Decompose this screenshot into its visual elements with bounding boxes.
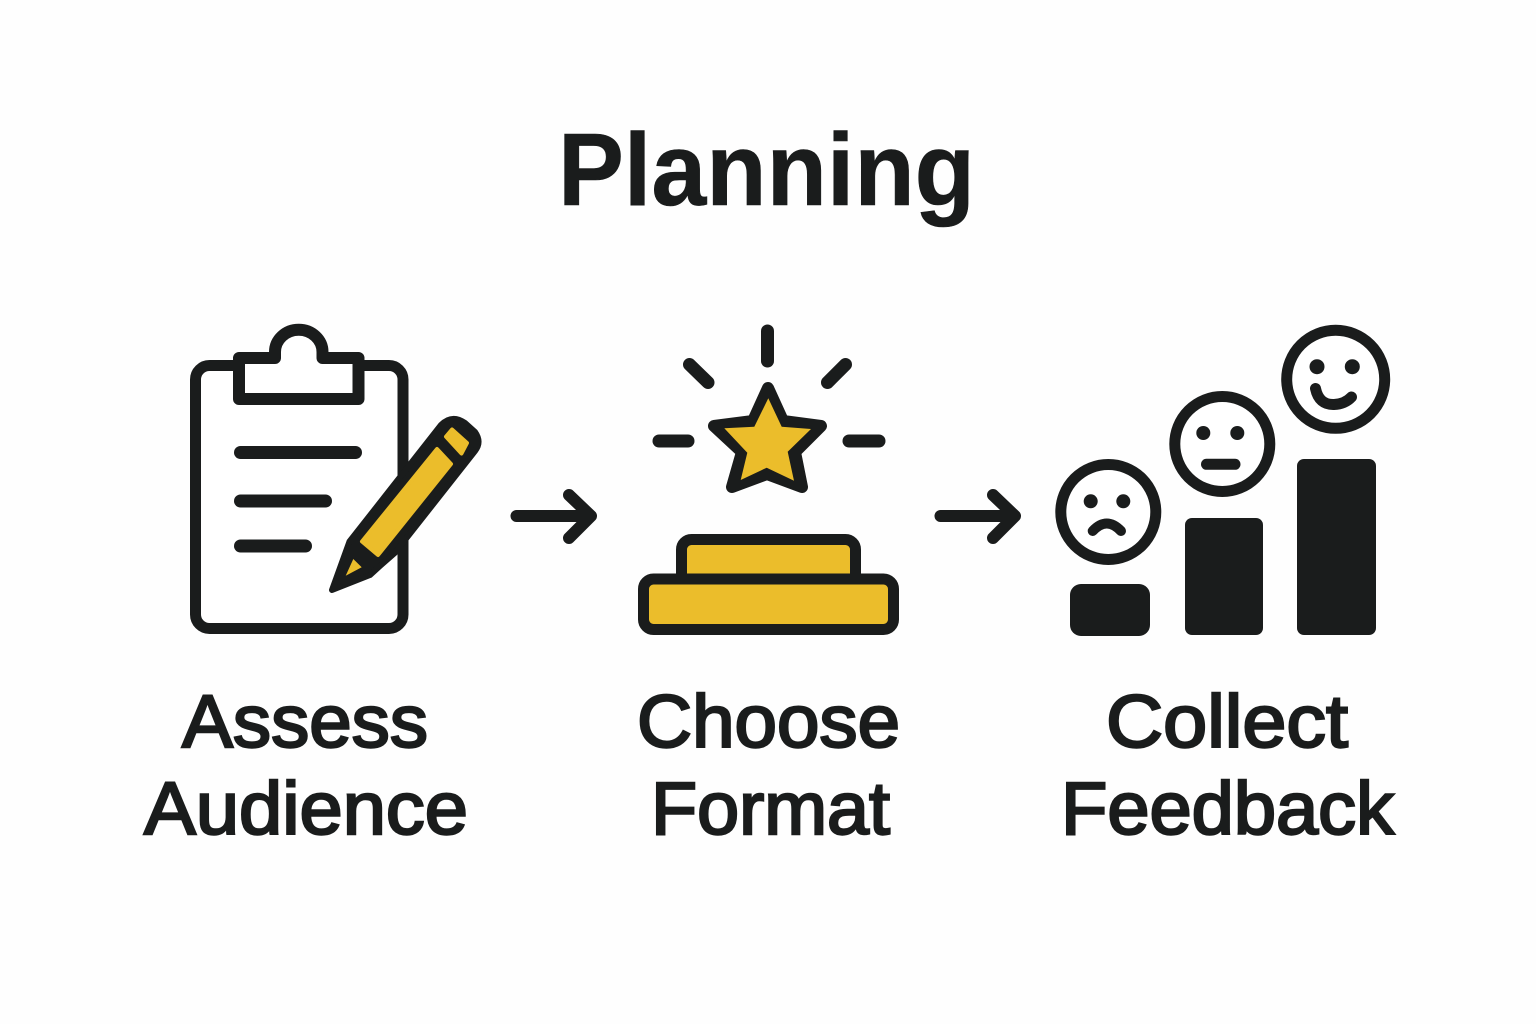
label: Collect Feedback bbox=[1061, 680, 1395, 850]
label: Choose Format: Format bbox=[651, 767, 890, 850]
label: Collect Feedback: Collect bbox=[1106, 680, 1348, 763]
title: Planning bbox=[558, 112, 975, 227]
pencil bbox=[332, 419, 478, 590]
icon: star on podium bbox=[644, 331, 894, 630]
short bar bbox=[1070, 584, 1150, 636]
arrow 2 bbox=[940, 495, 1015, 538]
arrow 1 bbox=[516, 495, 591, 538]
icon: clipboard with pencil bbox=[196, 330, 478, 628]
checklist lines bbox=[240, 452, 356, 546]
podium top step bbox=[682, 540, 856, 586]
rays bbox=[659, 331, 879, 441]
label: Assess Audience bbox=[144, 680, 468, 850]
podium bottom step bbox=[644, 579, 894, 630]
star bbox=[714, 388, 821, 487]
medium bar bbox=[1185, 518, 1263, 635]
label: Choose Format bbox=[637, 680, 900, 850]
label: Assess Audience: Assess bbox=[182, 680, 428, 763]
icon: feedback faces and bars bbox=[1061, 330, 1385, 636]
happy face bbox=[1287, 330, 1385, 428]
neutral face bbox=[1175, 396, 1270, 492]
sad face bbox=[1061, 464, 1156, 560]
tall bar bbox=[1297, 459, 1376, 635]
clipboard board bbox=[196, 366, 403, 628]
label: Collect Feedback: Feedback bbox=[1061, 767, 1395, 850]
label: Assess Audience: Audience bbox=[144, 767, 468, 850]
label: Choose Format: Choose bbox=[637, 680, 900, 763]
clipboard clip bbox=[239, 330, 358, 399]
